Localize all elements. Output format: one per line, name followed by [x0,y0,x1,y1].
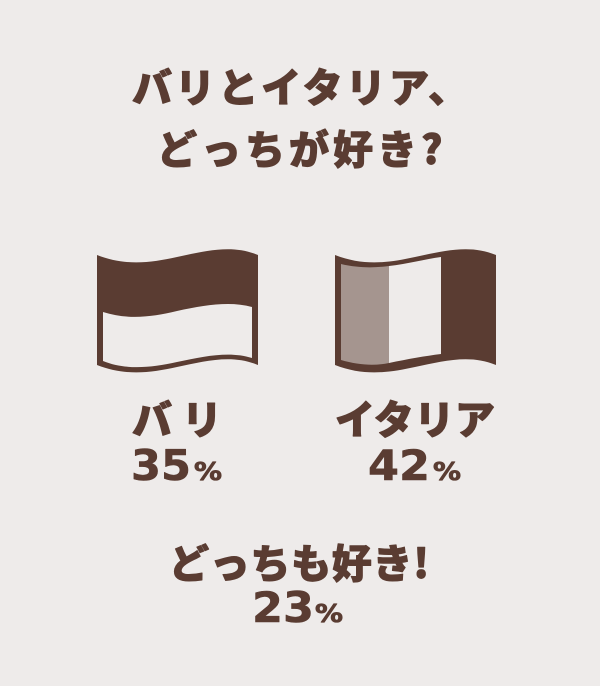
label: Bali 35%: 35 [131,441,191,490]
label: Italy 42%: 42 [368,441,430,490]
label: both 23% [169,532,430,632]
label: both 23%: 23 [252,583,314,632]
label: Italy 42% [335,388,495,490]
label: both 23%: % [315,599,343,628]
title [132,56,471,176]
title: バリとイタリア、 [132,56,471,114]
label: Italy 42%: イタリア [335,388,495,446]
label: Bali 35%: % [194,457,222,486]
label: both 23%: どっちも好き! [169,532,430,590]
label: Bali 35%: バリ [132,388,232,446]
label: Italy 42%: % [433,457,461,486]
label: Bali 35% [131,388,232,490]
panel: Bali flag [97,249,258,372]
title: どっちが好き? [157,118,446,176]
panel: Italy flag [335,249,496,372]
